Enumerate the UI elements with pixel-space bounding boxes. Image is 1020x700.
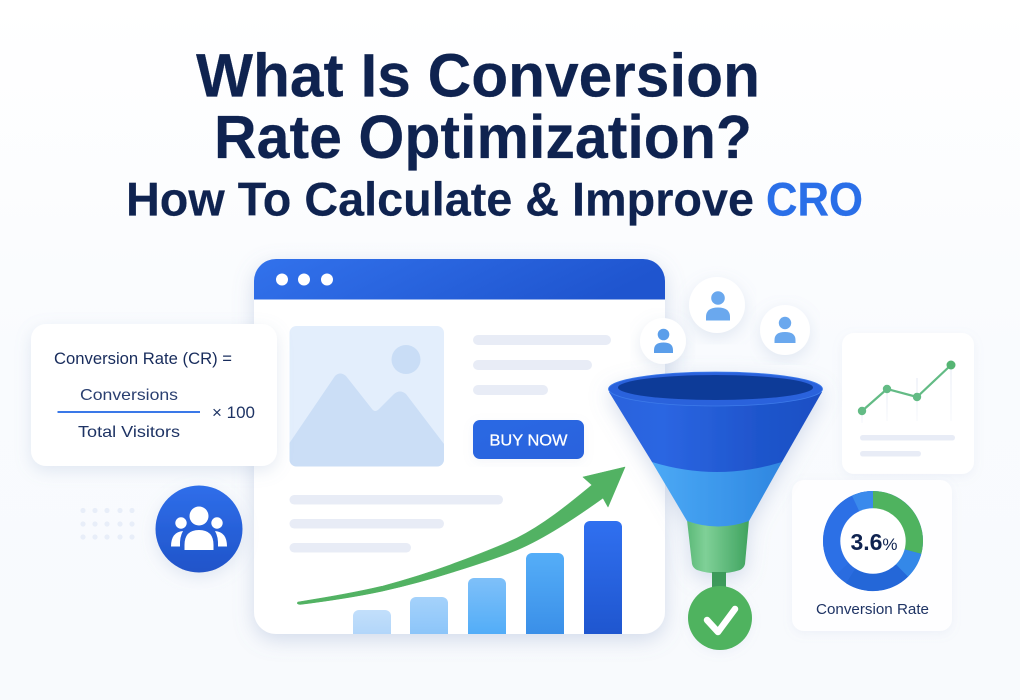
donut value: 3.6% [850,529,898,555]
panel: line chart card [842,333,974,474]
title line 2: Rate Optimization? [214,103,752,171]
funnel mid section [652,462,782,526]
icon: user top [689,277,745,333]
panel: browser window [254,259,665,634]
icon: success check [688,586,752,650]
placeholder text lines: top [473,335,611,395]
icon: audience group [156,486,242,572]
denominator: Total Visitors [78,424,180,441]
multiplier: × 100 [212,403,255,422]
placeholder text lines: bottom [290,495,503,552]
formula heading: Conversion Rate (CR) = [54,350,232,368]
image placeholder [290,326,444,466]
donut caption: Conversion Rate [816,602,929,618]
numerator: Conversions [80,387,178,404]
icon: user right [760,305,810,355]
panel: conversion rate card [792,480,952,631]
line chart [858,360,956,423]
funnel top cone [609,392,822,472]
funnel stem [712,572,726,592]
title [126,42,863,226]
title line 1: What Is Conversion [196,42,760,110]
funnel green spout [687,520,749,574]
placeholder text lines: chart card [860,435,955,456]
browser header bar [254,259,665,300]
fraction line [58,411,200,413]
window dots [276,274,333,286]
dot pattern [80,508,135,540]
icon: user left [640,318,686,364]
funnel [608,372,822,574]
funnel opening [618,375,813,400]
funnel rim [608,372,822,406]
button: buy now [473,420,584,459]
subtitle highlight: CRO: CRO [766,172,863,226]
donut chart [823,491,923,591]
panel: formula card [31,324,277,466]
bar chart [353,521,622,634]
arrow: growth trend [297,467,625,604]
subtitle: How To Calculate & Improve [126,172,754,226]
button: buy now: BUY NOW [490,432,568,450]
